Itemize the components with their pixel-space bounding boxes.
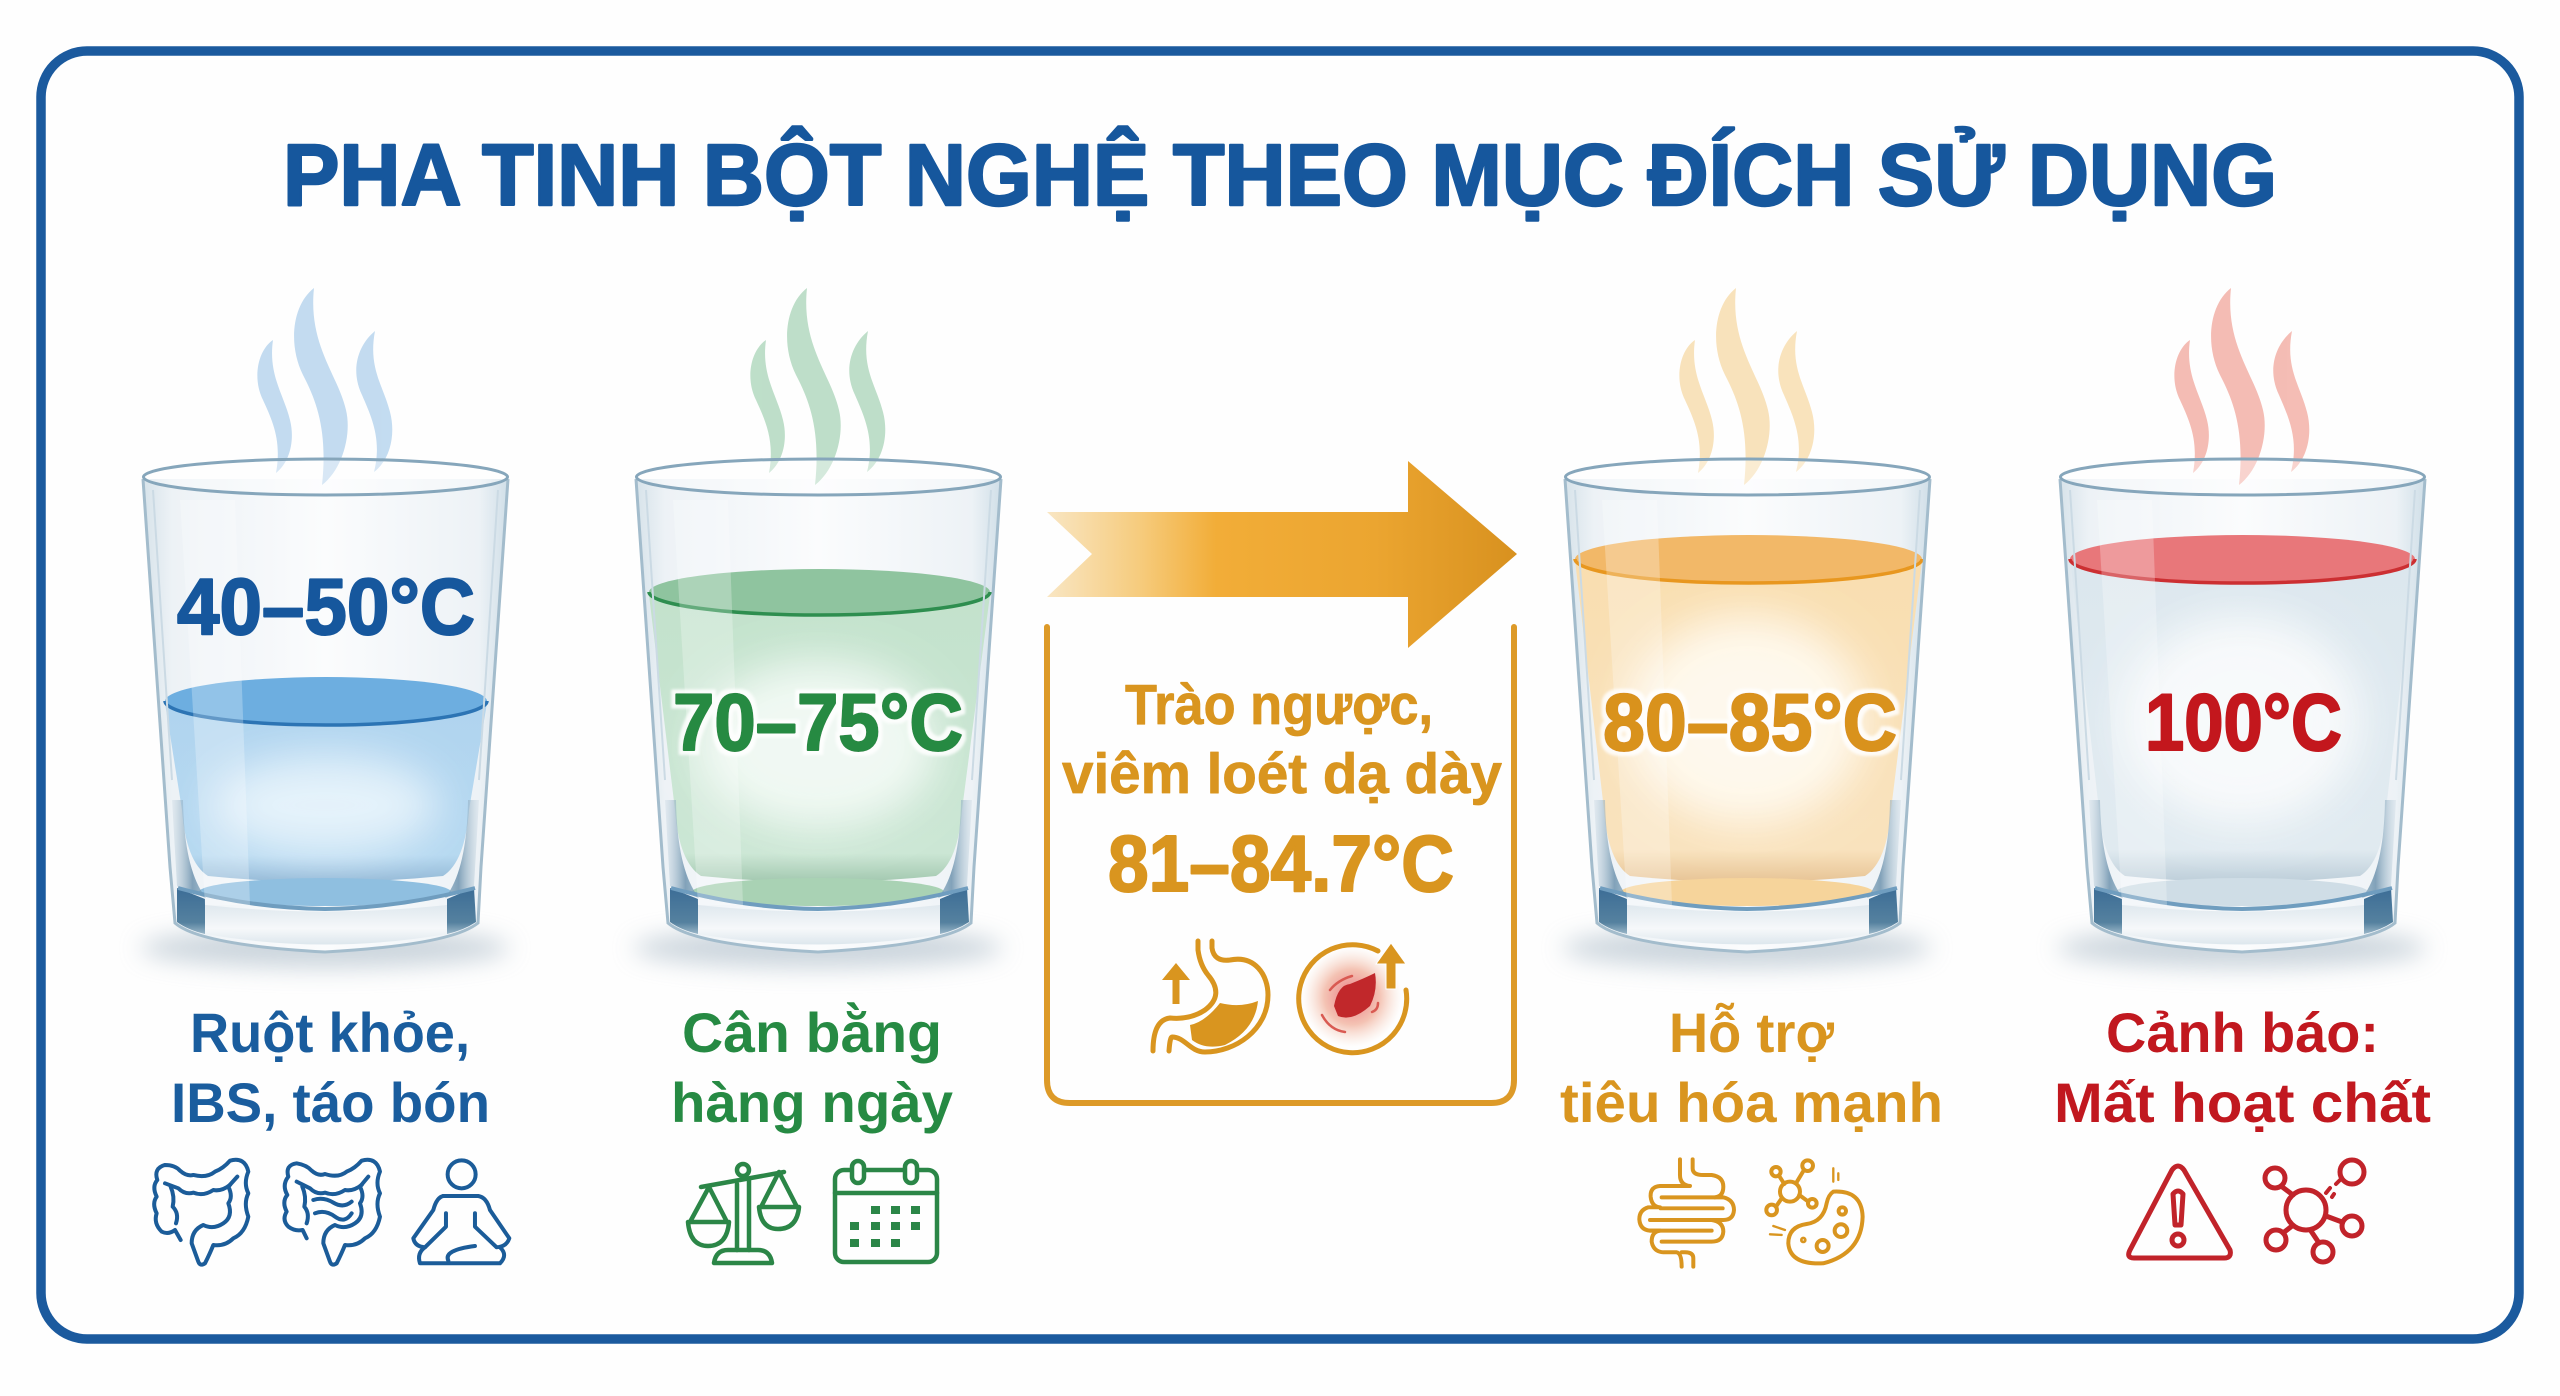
arrow — [1047, 461, 1517, 648]
steam: blue — [257, 288, 392, 485]
water surface — [1575, 535, 1922, 583]
steam: red — [2174, 288, 2309, 485]
label: daily balance — [671, 1001, 953, 1134]
panel: 80–85°C strong digestion — [1560, 288, 1943, 1267]
label: daily balance: Cân bằng — [682, 1001, 942, 1064]
temperature: 40–50°C: 40–50°C — [177, 562, 475, 651]
label: warning: Cảnh báo: — [2106, 1001, 2379, 1064]
water body — [649, 595, 990, 882]
callout bracket — [1047, 627, 1514, 1103]
icon: colon — [154, 1160, 248, 1265]
panel: 40–50°C gut health — [140, 288, 510, 1265]
water surface — [649, 569, 990, 615]
water body — [2070, 558, 2415, 882]
callout text: Trào ngược, — [1125, 673, 1433, 737]
label: gut health: Ruột khỏe, — [190, 1001, 470, 1064]
label: strong digestion: Hỗ trợ — [1669, 1001, 1834, 1064]
label: daily balance: hàng ngày — [671, 1071, 953, 1134]
icon: molecule and gut bacterium — [1766, 1160, 1863, 1263]
steam: green — [750, 288, 885, 485]
label: gut health — [171, 1001, 490, 1134]
water body — [1575, 560, 1922, 882]
label: strong digestion: tiêu hóa mạnh — [1560, 1071, 1943, 1134]
panel: reflux and gastric ulcer callout — [1047, 461, 1517, 1103]
icon: warning triangle — [2129, 1166, 2230, 1258]
temperature: 70–75°C: 70–75°C — [673, 678, 963, 768]
temperature: 80–85°C: 80–85°C — [1603, 678, 1897, 768]
label: warning — [2054, 1001, 2431, 1134]
icon: meditation — [413, 1160, 509, 1263]
label: warning: Mất hoạt chất — [2054, 1071, 2431, 1134]
callout text: viêm loét dạ dày — [1062, 742, 1502, 806]
icon: irritable colon — [284, 1160, 380, 1265]
temperature: 100°C: 100°C — [2145, 678, 2342, 768]
glass: blue water — [140, 288, 510, 968]
water surface — [2070, 535, 2415, 583]
glass: amber water — [1562, 288, 1932, 968]
water body — [165, 703, 487, 882]
glass: green water — [633, 288, 1003, 968]
icon: stomach with reflux arrow — [1153, 941, 1268, 1052]
panel: 70–75°C daily balance — [633, 288, 1003, 1263]
icon: calendar — [835, 1161, 937, 1262]
steam: amber — [1679, 288, 1814, 485]
title: PHA TINH BỘT NGHỆ THEO MỤC ĐÍCH SỬ DỤNG — [283, 127, 2277, 224]
callout text: 81–84.7°C — [1108, 819, 1454, 908]
icon: ulcer with arrow — [1299, 943, 1407, 1053]
icon: broken molecule — [2265, 1160, 2364, 1262]
label: strong digestion — [1560, 1001, 1943, 1134]
label: gut health: IBS, táo bón — [171, 1071, 490, 1134]
glass: boiling water — [2057, 288, 2427, 968]
panel: 100°C warning — [2054, 288, 2431, 1262]
icon: balance scale — [688, 1164, 799, 1263]
icon: intestine — [1639, 1159, 1734, 1267]
callout text — [1062, 673, 1502, 908]
water surface — [165, 677, 487, 725]
